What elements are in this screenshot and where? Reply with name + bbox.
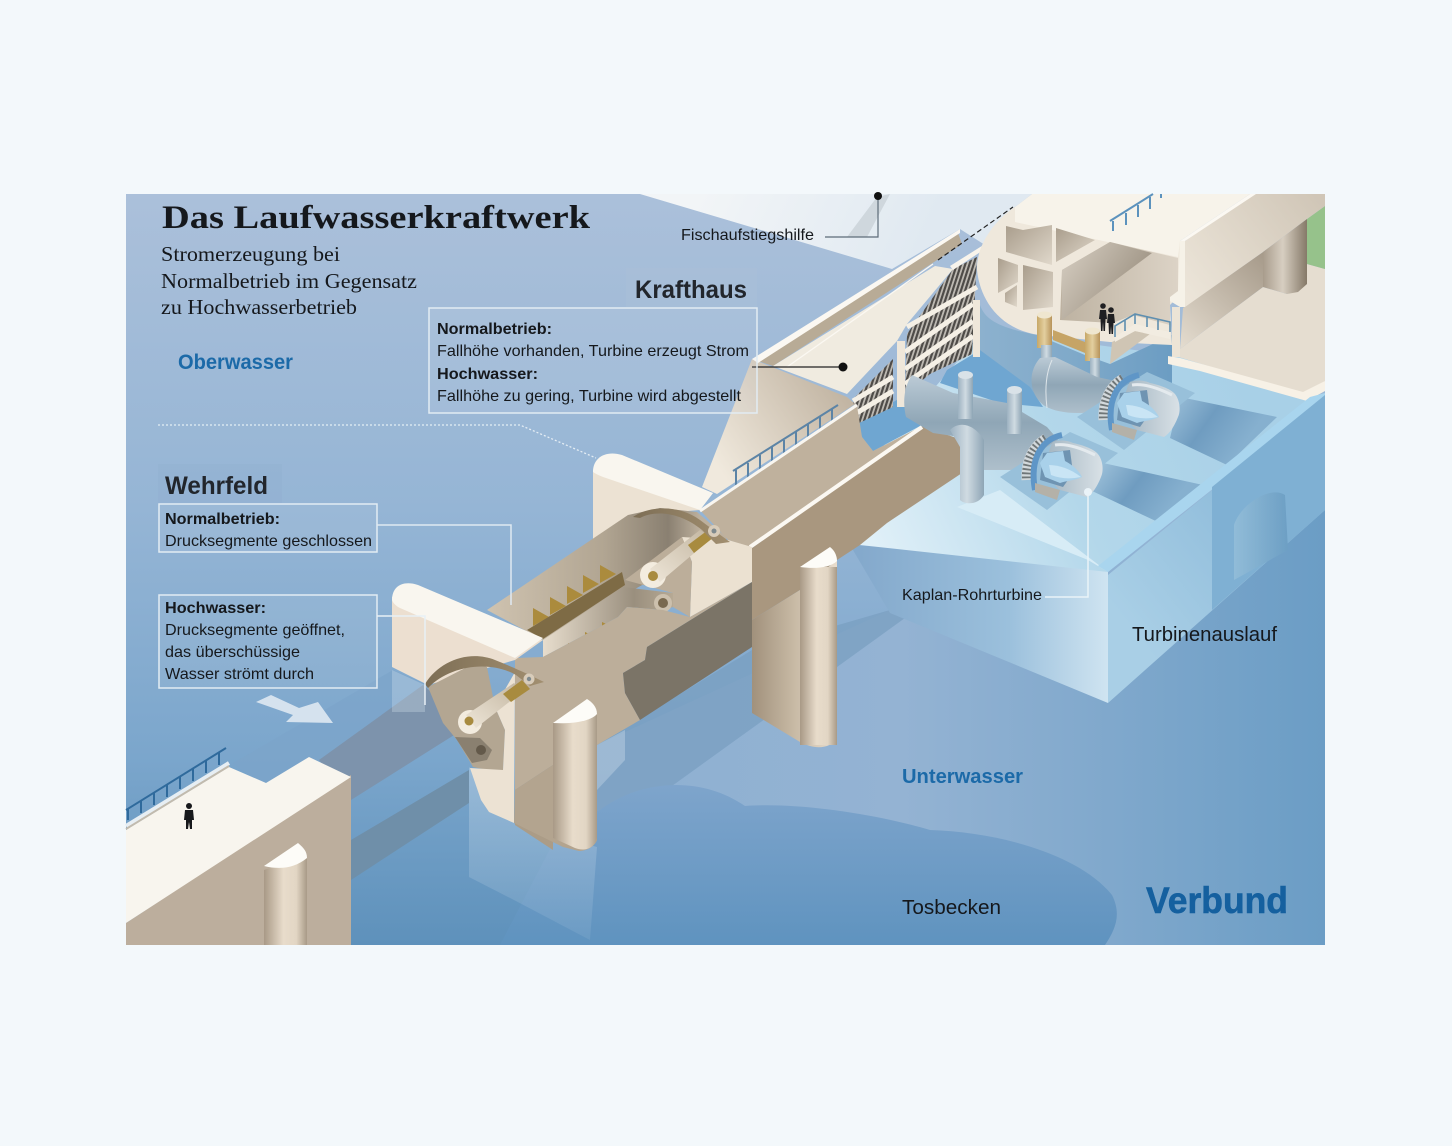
intake water patches <box>857 350 1043 451</box>
flow arrow <box>256 695 333 723</box>
brown wall <box>752 426 962 620</box>
Krafthaus text box: Normalbetrieb: <box>437 321 552 338</box>
water level dotted line <box>158 425 596 458</box>
pale floor wedge <box>957 490 1108 572</box>
Kaplan label: Kaplan-Rohrturbine <box>902 587 1042 604</box>
outflow box left face <box>850 545 1108 703</box>
slate channel bands <box>233 670 470 880</box>
rooms <box>998 225 1178 325</box>
main tan mass <box>515 582 752 790</box>
lower water <box>580 510 1325 945</box>
front gate pivot <box>524 674 534 684</box>
far bank land <box>640 194 1032 269</box>
gate arm pin <box>654 594 672 612</box>
subtitle: Stromerzeugung bei <box>161 242 340 266</box>
Kaplan leader line <box>1045 488 1092 597</box>
upper rail <box>1110 194 1161 231</box>
title: Das Laufwasserkraftwerk <box>162 200 591 236</box>
rack panels <box>853 257 980 424</box>
rear turbine runner <box>1077 372 1195 450</box>
front gate cylinder <box>458 680 530 734</box>
Wehrfeld flood box: Hochwasser: <box>165 600 266 617</box>
Wehrfeld flood box: Drucksegmente geöffnet, <box>165 622 345 639</box>
rear turbine brass pipes <box>1037 312 1100 361</box>
Wehrfeld heading <box>158 464 282 503</box>
back water of hall <box>980 305 1172 410</box>
outflow box top edge <box>1098 393 1325 572</box>
deck white edge <box>700 405 857 511</box>
Wehrfeld flood leader <box>377 616 425 705</box>
stilling basin Tosbecken <box>500 785 1117 945</box>
picture frame <box>126 194 1325 945</box>
front gate panel <box>428 663 505 772</box>
Wehrfeld flood box <box>159 595 377 688</box>
Verbund logo: Verbund <box>1146 880 1288 921</box>
Krafthaus text box: Fallhöhe vorhanden, Turbine erzeugt Strom <box>437 343 749 360</box>
outlet tube front <box>1090 463 1203 523</box>
lower white cap <box>950 244 985 270</box>
rear cream edge <box>1168 356 1325 401</box>
upper gate sector arc <box>633 508 730 544</box>
Krafthaus leader <box>752 362 848 372</box>
wall thin line <box>787 264 933 367</box>
Fischaufstiegshilfe leader <box>825 192 882 237</box>
hall floor <box>860 330 1310 572</box>
Fischaufstiegshilfe label: Fischaufstiegshilfe <box>681 227 814 244</box>
Tosbecken label: Tosbecken <box>902 897 1001 919</box>
dam water shadow <box>597 610 905 840</box>
dark underside <box>623 582 752 720</box>
Oberwasser label: Oberwasser <box>178 351 293 374</box>
front turbine runner <box>1000 432 1118 510</box>
outlet tube rear <box>1170 397 1277 465</box>
Wehrfeld flood box: Wasser strömt durch <box>165 666 314 683</box>
Krafthaus text box: Fallhöhe zu gering, Turbine wird abgestellt <box>437 388 742 405</box>
Krafthaus text box: Hochwasser: <box>437 366 538 383</box>
dam side cream <box>682 537 752 617</box>
right pier <box>752 547 837 747</box>
upper beam <box>752 229 962 366</box>
pier 1 top <box>392 583 543 658</box>
front turbine body <box>904 371 1067 503</box>
Wehrfeld normal box: Normalbetrieb: <box>165 511 280 528</box>
lower stairs <box>568 622 619 660</box>
front gate sector arc <box>425 656 544 688</box>
hall walkway <box>1110 314 1170 364</box>
Turbinenauslauf label: Turbinenauslauf <box>1132 624 1277 646</box>
powerhouse cream wall <box>773 266 953 394</box>
gate opening <box>487 508 727 640</box>
upper water <box>126 194 1325 945</box>
guard rail on deck <box>733 405 838 485</box>
brass beam <box>527 572 625 639</box>
deck lower white line <box>750 427 922 547</box>
powerhouse section body <box>977 207 1180 345</box>
powerhouse roof slab <box>1015 194 1250 257</box>
front wall cream <box>470 672 515 823</box>
pale water reflections <box>392 670 625 940</box>
subtitle: Normalbetrieb im Gegensatz <box>161 269 417 293</box>
Wehrfeld normal leader <box>377 525 511 605</box>
Wehrfeld heading: Wehrfeld <box>165 472 268 500</box>
upper gate hydraulic cylinder <box>640 530 714 588</box>
front gate link <box>455 737 492 763</box>
subtitle: zu Hochwasserbetrieb <box>161 295 357 319</box>
Wehrfeld normal box <box>159 504 377 552</box>
rear turbine body <box>1032 345 1120 413</box>
Krafthaus text box <box>429 308 757 413</box>
powerhouse slope wall <box>702 359 855 494</box>
Krafthaus heading: Krafthaus <box>635 276 747 304</box>
lower wall tan <box>515 765 553 850</box>
person on bank <box>184 803 194 829</box>
foreground rail <box>126 748 229 829</box>
right overhang block <box>1170 194 1325 357</box>
outflow box right face <box>1108 398 1325 703</box>
rear cream mass <box>1170 264 1325 396</box>
dashed axis line <box>938 207 1013 260</box>
gate side panel <box>625 537 692 617</box>
green land patch <box>1307 206 1325 269</box>
upper stairs <box>533 565 616 626</box>
Wehrfeld normal box: Drucksegmente geschlossen <box>165 533 372 550</box>
Krafthaus heading <box>626 268 757 307</box>
pier 1 face <box>392 590 543 685</box>
upper gate pivot <box>708 525 720 537</box>
front pier cylinder <box>553 699 597 850</box>
subtitle <box>161 242 417 319</box>
fish ladder shadow <box>847 194 890 237</box>
foreground bank <box>126 757 351 945</box>
Wehrfeld flood box: das überschüssige <box>165 644 300 661</box>
deck road <box>700 406 922 547</box>
Unterwasser label: Unterwasser <box>902 766 1023 788</box>
upstream pier 2 <box>593 454 713 540</box>
outflow pier with arch <box>1212 395 1325 610</box>
dam bottom <box>514 740 597 851</box>
gate arm <box>543 587 673 657</box>
people in hall <box>1099 303 1115 334</box>
